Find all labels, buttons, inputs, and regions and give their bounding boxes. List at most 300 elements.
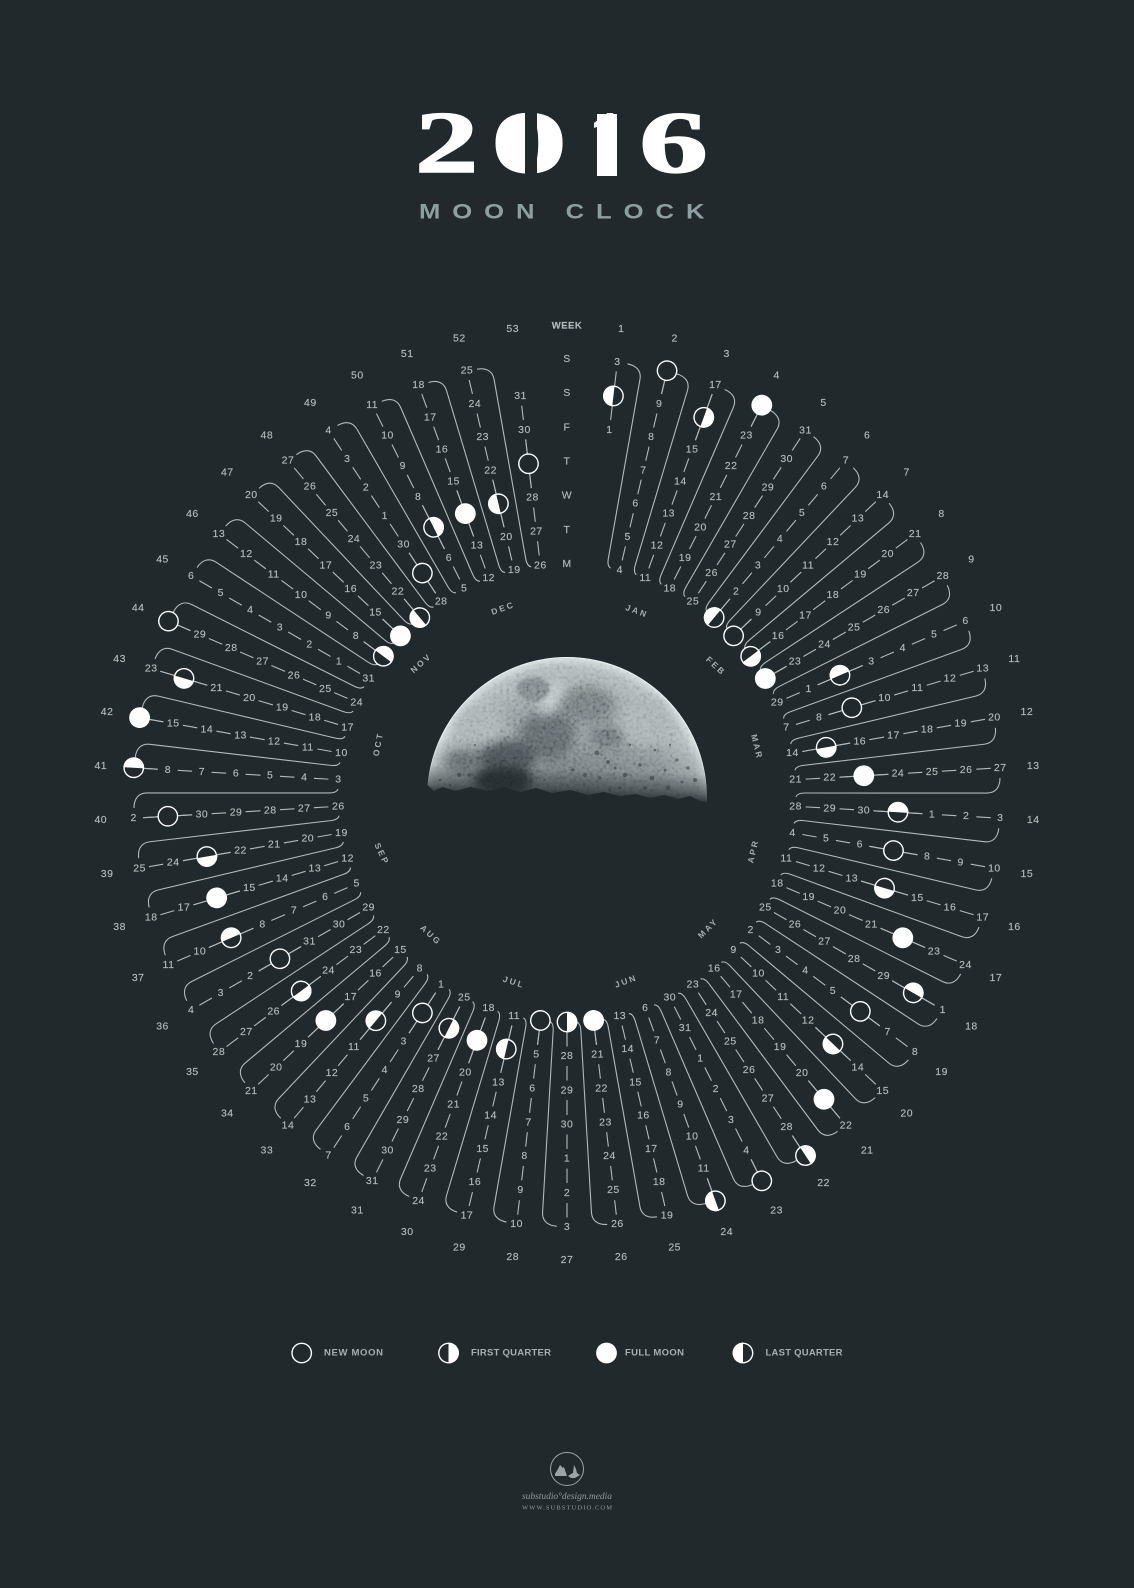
week 16: 16	[944, 902, 956, 914]
week 25: 14	[621, 1043, 634, 1055]
week 30	[377, 991, 501, 1243]
week 53: 31	[514, 390, 527, 402]
week 46: 13	[213, 528, 225, 540]
week 3: 12	[651, 540, 663, 552]
week 7: 13	[851, 513, 864, 525]
week 39: 20	[301, 833, 314, 845]
week 45: 31	[362, 672, 375, 684]
week 49: 3	[344, 453, 350, 465]
weekday column	[552, 320, 582, 570]
week 2: 7	[640, 464, 647, 476]
week 41: 8	[165, 764, 171, 776]
week 4: 19	[679, 552, 691, 564]
weekday column: T	[564, 456, 571, 468]
week 50	[345, 355, 493, 599]
week 41: 6	[233, 768, 239, 780]
week 16: 11	[780, 853, 792, 865]
legend: last quarter	[733, 1343, 843, 1363]
week 46: 12	[240, 548, 253, 560]
title: 2016: 6	[639, 95, 708, 192]
title: 2016: 2	[415, 95, 478, 192]
week 12	[784, 701, 1039, 783]
month labels: SEP	[372, 841, 392, 867]
week 17: 24	[959, 959, 972, 971]
week 48: 24	[348, 533, 360, 545]
week 12: 14	[786, 747, 799, 759]
week 31: 27	[427, 1053, 440, 1065]
week 48	[253, 410, 449, 632]
week 29: 14	[484, 1110, 497, 1122]
week 5: 25	[686, 596, 699, 608]
week 3: 3	[724, 348, 730, 360]
week 38: 13	[309, 863, 321, 875]
week 35: 28	[213, 1046, 225, 1058]
week 19: 5	[830, 985, 836, 997]
week 49: 49	[304, 397, 317, 409]
subtitle: Moon Clock: MOON CLOCK	[419, 200, 705, 223]
clock: week columns	[92, 321, 1042, 1267]
week 48: 26	[304, 481, 316, 493]
legend: full moon: FULL MOON	[625, 1348, 684, 1358]
week 7: 10	[777, 583, 790, 595]
week 12: 17	[887, 729, 900, 741]
week 38: 17	[178, 902, 190, 914]
week 5: 5	[820, 397, 827, 409]
week 24: 11	[698, 1163, 710, 1175]
week 20: 20	[900, 1107, 913, 1119]
week 51: 18	[412, 379, 425, 391]
week 47: 16	[344, 583, 357, 595]
week 29: 15	[476, 1143, 489, 1155]
legend	[292, 1343, 843, 1363]
week 30: 18	[482, 1002, 495, 1014]
week 23	[640, 986, 789, 1231]
week 35: 22	[377, 924, 390, 936]
week 25: 16	[637, 1110, 650, 1122]
week 26: 21	[591, 1048, 604, 1060]
week 45: 45	[156, 554, 169, 566]
week 12: 12	[1021, 706, 1033, 718]
week 16: 15	[911, 892, 924, 904]
week 37: 10	[194, 945, 206, 957]
week 30: 24	[412, 1195, 425, 1207]
week 24: 6	[642, 1002, 648, 1014]
week 17: 21	[865, 918, 878, 930]
week 32: 3	[400, 1035, 407, 1047]
week 16	[771, 847, 1025, 957]
weekday column: W	[562, 490, 572, 502]
month labels: AUG	[418, 923, 444, 947]
week 4: 21	[709, 491, 722, 503]
week 28: 9	[517, 1184, 524, 1196]
week 7: 12	[827, 536, 839, 548]
week 9: 9	[968, 554, 975, 566]
week 52: 24	[468, 398, 481, 410]
week 13: 24	[892, 768, 904, 780]
week 49	[298, 380, 470, 614]
week 50: 6	[446, 552, 452, 564]
week 53	[502, 321, 551, 573]
week 33: 14	[282, 1119, 294, 1131]
week 19: 3	[775, 944, 781, 956]
week 32: 4	[382, 1064, 388, 1076]
week 37: 5	[354, 878, 360, 890]
week 40: 26	[332, 800, 345, 812]
week 25: 15	[629, 1076, 642, 1088]
week 5	[681, 392, 852, 625]
week 1	[583, 322, 651, 570]
month labels: NOV	[408, 651, 434, 675]
week 33: 9	[395, 989, 401, 1001]
week 25: 25	[668, 1241, 681, 1253]
legend: last quarter: LAST QUARTER	[766, 1348, 843, 1358]
week 43: 21	[210, 682, 223, 694]
week 31: 31	[351, 1204, 364, 1216]
week 17: 23	[928, 945, 940, 957]
week 15: 9	[958, 856, 964, 868]
week 38: 14	[276, 872, 289, 884]
week 38: 38	[113, 921, 126, 933]
week 12: 16	[853, 735, 866, 747]
week 50: 9	[400, 460, 406, 472]
week 9: 27	[907, 587, 920, 599]
week 35	[168, 901, 396, 1085]
week 4: 4	[773, 370, 780, 382]
week 32: 32	[304, 1177, 317, 1189]
week 50: 50	[351, 370, 364, 382]
week 18: 18	[965, 1020, 978, 1032]
week 44	[127, 578, 376, 714]
week 13: 21	[789, 774, 802, 786]
week 49: 1	[382, 510, 388, 522]
week 52	[448, 325, 544, 580]
week 39: 22	[234, 845, 247, 857]
week 8: 21	[909, 528, 921, 540]
week 13: 25	[926, 766, 938, 778]
week 15: 10	[988, 862, 1001, 874]
weekday column: T	[564, 524, 571, 536]
week 23: 4	[743, 1144, 750, 1156]
week 11: 7	[783, 721, 790, 733]
month labels: DEC	[490, 599, 516, 617]
week 35: 23	[350, 944, 362, 956]
week 22: 26	[743, 1064, 755, 1076]
week 2: 9	[656, 398, 662, 410]
month labels: APR	[745, 838, 761, 864]
week 25	[590, 1007, 684, 1261]
week 49: 2	[363, 481, 369, 493]
week 33: 13	[304, 1093, 316, 1105]
week 49: 30	[397, 539, 410, 551]
weekday column: M	[562, 558, 572, 570]
week 49: 4	[325, 424, 332, 436]
week 36: 29	[362, 902, 375, 914]
week 52: 20	[500, 531, 513, 543]
week 44: 25	[319, 683, 332, 695]
week 37: 37	[132, 972, 145, 984]
week 46: 10	[295, 589, 307, 601]
week 1: 3	[614, 356, 621, 368]
week 18: 1	[940, 1004, 946, 1016]
week 8	[737, 503, 964, 686]
week 37	[119, 855, 365, 990]
week 29: 16	[468, 1176, 481, 1188]
week 47: 19	[270, 513, 283, 525]
week 43: 19	[276, 702, 289, 714]
week 33: 33	[260, 1145, 273, 1157]
week 34	[201, 923, 414, 1127]
week 11: 11	[911, 682, 923, 694]
week 25: 19	[661, 1209, 673, 1221]
week 39: 19	[335, 827, 348, 839]
week 22: 22	[817, 1177, 830, 1189]
week 41: 5	[267, 770, 273, 782]
week 2: 4	[617, 564, 623, 576]
week 35: 26	[267, 1005, 280, 1017]
title: 2016: 0	[491, 95, 567, 192]
week 49: 28	[435, 596, 448, 608]
week 13: 26	[960, 764, 972, 776]
week 2: 5	[625, 531, 631, 543]
week 6: 4	[777, 533, 783, 545]
week 44: 29	[194, 629, 206, 641]
credit: substudio: substudio°design.media	[522, 1491, 612, 1502]
week 14: 28	[789, 800, 802, 812]
week 14: 29	[823, 802, 836, 814]
week 29: 17	[461, 1209, 473, 1221]
week 34: 15	[394, 944, 407, 956]
week 7: 14	[876, 489, 889, 501]
week 27: 29	[561, 1084, 573, 1096]
week 27: 28	[561, 1050, 573, 1062]
week 7: 11	[802, 560, 814, 572]
weekday column: WEEK	[552, 320, 582, 332]
week 37: 11	[163, 959, 174, 971]
week 32: 7	[325, 1150, 332, 1162]
week 23: 2	[713, 1083, 719, 1095]
week 23: 1	[697, 1053, 704, 1065]
month labels	[371, 599, 765, 990]
week 11: 10	[878, 692, 891, 704]
week 10: 6	[962, 615, 969, 627]
week 39: 21	[268, 839, 281, 851]
week 30: 30	[401, 1226, 414, 1238]
week 51: 17	[424, 411, 437, 423]
week 45: 3	[277, 621, 283, 633]
week 25: 18	[653, 1176, 666, 1188]
week 3: 11	[639, 572, 651, 584]
week 30: 22	[436, 1131, 448, 1143]
week 35: 27	[240, 1026, 253, 1038]
week 34: 21	[245, 1085, 258, 1097]
week 28: 8	[521, 1150, 528, 1162]
week 18	[743, 894, 984, 1056]
month labels: MAR	[749, 733, 765, 761]
week 38: 18	[145, 911, 158, 923]
week 16: 12	[813, 863, 825, 875]
week 53: 28	[526, 492, 539, 504]
week 21: 20	[796, 1067, 808, 1079]
week 45: 6	[188, 570, 194, 582]
week 27: 27	[561, 1254, 573, 1266]
week 47: 20	[245, 489, 258, 501]
week 39: 24	[167, 856, 180, 868]
week 42	[98, 682, 354, 765]
week 37: 8	[259, 918, 266, 930]
week 6: 7	[843, 455, 849, 467]
week 39: 25	[133, 862, 146, 874]
week 46: 46	[186, 508, 199, 520]
week 42: 10	[335, 747, 348, 759]
week 5: 26	[705, 567, 718, 579]
week 53: 27	[530, 526, 543, 538]
week 43: 20	[243, 692, 256, 704]
week 48: 23	[370, 559, 382, 571]
week 46: 9	[325, 609, 332, 621]
week 15: 15	[1021, 868, 1033, 880]
title: 2016: 1	[589, 95, 624, 192]
week 9	[751, 548, 991, 709]
week 20: 10	[752, 968, 765, 980]
week 53: 53	[506, 323, 519, 335]
week 5: 31	[799, 424, 812, 436]
week 8: 17	[799, 609, 812, 621]
week 15: 4	[789, 827, 796, 839]
week 34: 19	[295, 1038, 307, 1050]
week 24: 10	[686, 1131, 698, 1143]
week 13: 27	[994, 762, 1007, 774]
week 43	[109, 629, 363, 740]
week 24: 24	[720, 1226, 733, 1238]
week 21: 22	[840, 1119, 852, 1131]
week 4: 18	[663, 582, 676, 594]
week 18: 28	[848, 953, 860, 965]
week 27: 2	[564, 1187, 570, 1199]
week 52: 19	[508, 564, 521, 576]
week 34: 34	[221, 1107, 234, 1119]
legend: full moon	[596, 1343, 684, 1363]
week 14: 1	[929, 808, 935, 820]
week 24: 8	[666, 1066, 672, 1078]
week 18: 29	[877, 970, 890, 982]
week 1: 1	[606, 424, 613, 436]
week 23: 3	[728, 1114, 734, 1126]
week 34: 17	[344, 991, 357, 1003]
legend: new moon: NEW MOON	[324, 1348, 383, 1358]
week 41: 3	[335, 774, 342, 786]
week 47	[214, 445, 428, 651]
week 20	[709, 939, 920, 1141]
week 45	[151, 530, 391, 690]
week 50: 5	[461, 582, 467, 594]
legend: first quarter: FIRST QUARTER	[471, 1348, 551, 1358]
week 8: 19	[854, 569, 867, 581]
week 28: 28	[506, 1251, 519, 1263]
week 3: 17	[709, 379, 722, 391]
week 19: 19	[935, 1066, 948, 1078]
week 36: 3	[218, 987, 224, 999]
week 53: 30	[518, 424, 531, 436]
week 44: 24	[350, 696, 363, 708]
week 42: 14	[201, 723, 213, 735]
week 41: 4	[301, 772, 307, 784]
week 16: 13	[845, 872, 858, 884]
week 40: 30	[196, 808, 208, 820]
week 15: 6	[857, 839, 863, 851]
week 46: 11	[268, 569, 280, 581]
week 13	[788, 755, 1042, 809]
week 10: 5	[931, 629, 937, 641]
week 45: 2	[306, 638, 313, 650]
week 47: 18	[295, 536, 307, 548]
week 40: 28	[264, 804, 277, 816]
week 9: 25	[848, 621, 860, 633]
week 32: 6	[344, 1121, 350, 1133]
week 4: 22	[725, 460, 737, 472]
week 17: 20	[834, 905, 846, 917]
week 48: 25	[326, 507, 338, 519]
week 28: 6	[529, 1082, 536, 1094]
week 19: 8	[912, 1046, 918, 1058]
week 52: 22	[484, 464, 497, 476]
month labels: FEB	[704, 654, 728, 678]
week 20: 14	[851, 1061, 864, 1073]
week 3: 15	[686, 443, 698, 455]
week 31: 28	[412, 1083, 425, 1095]
week 30: 20	[459, 1066, 472, 1078]
week 10	[766, 595, 1015, 732]
week 7	[720, 461, 931, 664]
week 12: 19	[954, 718, 967, 730]
week 51: 12	[482, 572, 495, 584]
month labels: JUN	[613, 972, 639, 990]
week 18: 27	[818, 936, 831, 948]
week 42: 12	[268, 735, 281, 747]
week 31: 31	[366, 1175, 379, 1187]
week 51: 51	[401, 348, 414, 360]
week 6: 6	[864, 429, 870, 441]
week 26: 24	[603, 1150, 616, 1162]
week 37: 7	[291, 905, 297, 917]
week 43: 17	[341, 721, 354, 733]
week 43: 23	[145, 663, 158, 675]
week 23: 30	[663, 992, 676, 1004]
week 8: 20	[881, 548, 894, 560]
week 6	[700, 423, 894, 644]
week 51	[395, 337, 519, 589]
week 23: 31	[679, 1022, 691, 1034]
week 9: 28	[937, 570, 949, 582]
week 10: 1	[806, 683, 812, 695]
week 28: 7	[525, 1116, 532, 1128]
week 6: 6	[821, 481, 827, 493]
week 9: 24	[818, 638, 831, 650]
week 26: 25	[607, 1184, 620, 1196]
week 44: 44	[132, 602, 145, 614]
week 16: 16	[1008, 921, 1021, 933]
week 10: 4	[900, 642, 906, 654]
week 52: 52	[453, 333, 466, 345]
week 25: 17	[645, 1143, 658, 1155]
week 20: 9	[730, 944, 737, 956]
legend: new moon	[292, 1343, 383, 1363]
week 27: 30	[561, 1118, 573, 1130]
month labels: JAN	[624, 602, 650, 620]
week 26: 26	[615, 1251, 628, 1263]
week 51: 16	[436, 443, 448, 455]
week 14: 14	[1027, 814, 1040, 826]
week 5: 30	[780, 453, 793, 465]
